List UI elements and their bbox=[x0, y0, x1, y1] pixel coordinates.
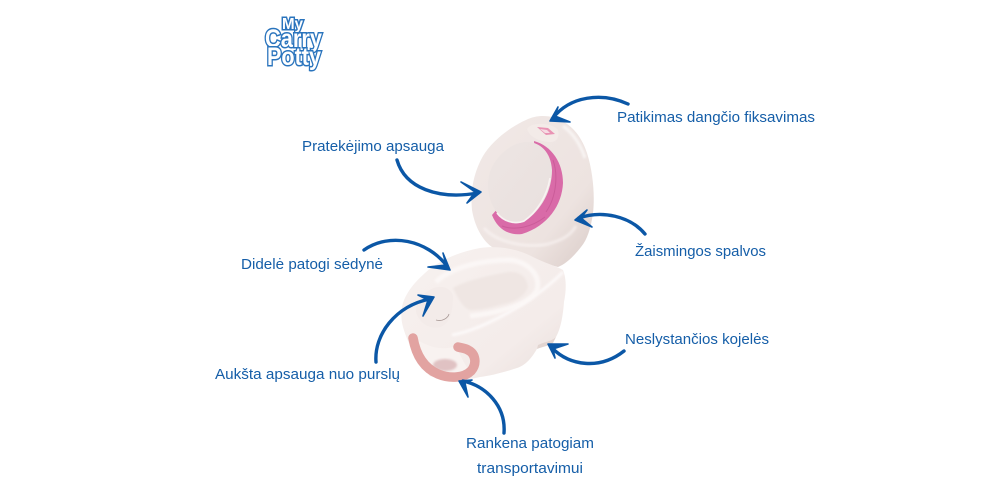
logo: My Carry Potty: Potty bbox=[267, 43, 321, 71]
logo: My Carry Potty: My bbox=[282, 16, 303, 33]
pink carry handle bbox=[413, 338, 475, 377]
label: carry handle: transportavimui bbox=[477, 461, 583, 477]
inner lid disc bbox=[488, 142, 552, 223]
label: high splash guard: Aukšta apsauga nuo purslų bbox=[215, 367, 400, 383]
non-slip feet bbox=[537, 337, 556, 349]
potty base bbox=[401, 247, 566, 380]
label: non-slip feet: Neslystančios kojelės bbox=[625, 332, 769, 348]
splash guard bbox=[416, 287, 453, 328]
arrow: lid latch bbox=[550, 97, 628, 122]
label: lid latch: Patikimas dangčio fiksavimas bbox=[617, 110, 815, 126]
lid latch bbox=[527, 124, 559, 142]
label: carry handle: Rankena patogiam bbox=[466, 436, 594, 452]
label: playful colours: Žaismingos spalvos bbox=[635, 243, 766, 260]
potty lid bbox=[471, 116, 594, 267]
label: leak protection: Pratekėjimo apsauga bbox=[302, 139, 445, 155]
arrow: non-slip feet bbox=[548, 344, 624, 363]
arrow: leak protection bbox=[397, 160, 481, 203]
potty seat opening bbox=[453, 272, 528, 310]
arrow: high splash guard bbox=[376, 295, 434, 362]
arrow: large comfortable seat bbox=[364, 240, 450, 270]
handle opening bbox=[414, 338, 470, 374]
pink seal ring bbox=[492, 141, 563, 234]
logo: My Carry Potty: Carry bbox=[265, 25, 322, 53]
label: carry handle bbox=[466, 436, 594, 477]
arrow: playful colours bbox=[575, 210, 645, 234]
logo: My Carry Potty bbox=[265, 16, 322, 71]
arrow: carry handle bbox=[459, 380, 504, 433]
label: large comfortable seat: Didelė patogi sėdynė bbox=[241, 257, 383, 273]
potty illustration bbox=[401, 116, 594, 380]
